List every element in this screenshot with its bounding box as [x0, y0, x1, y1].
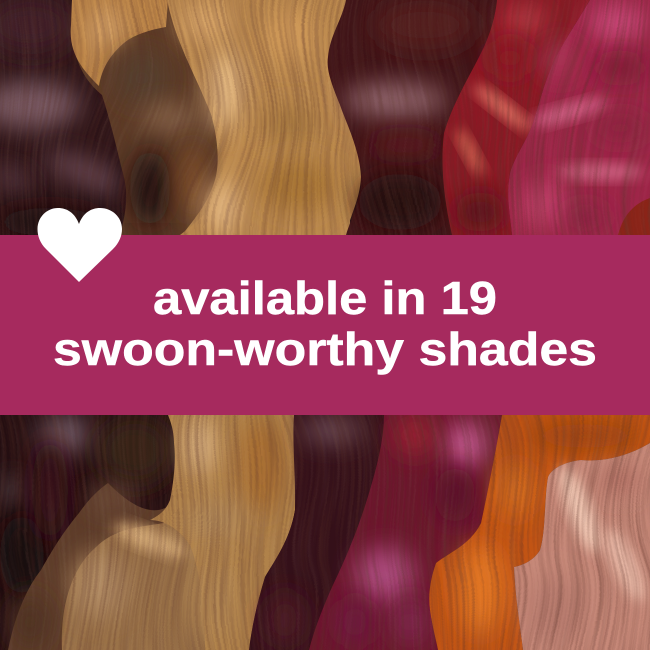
- swatch: deep burgundy: [328, 0, 497, 235]
- hair strand texture: top: [0, 0, 650, 235]
- headline line 1: available in 19: [153, 272, 497, 324]
- swatch: dark burgundy brown: [0, 0, 135, 236]
- swatch: vivid red: [442, 0, 590, 235]
- headline line 2: swoon-worthy shades: [53, 323, 597, 375]
- bottom hair swatches: [0, 415, 650, 650]
- swatch: berry magenta: [309, 415, 502, 650]
- swatch: rose gold: [514, 443, 650, 650]
- top hair swatches: [0, 0, 650, 236]
- swatch: honey blonde: [150, 415, 295, 650]
- hair strand texture: bottom: [0, 415, 650, 650]
- banner: [0, 235, 650, 415]
- swatch: near-black burgundy: [0, 415, 180, 650]
- headline: [53, 272, 597, 375]
- swatch: golden blonde: [167, 0, 361, 236]
- icon: heart: [38, 208, 122, 282]
- swatch: ash blonde and brown: [8, 483, 270, 650]
- swatch: caramel and chestnut brown: [71, 0, 218, 235]
- swatch: dark plum: [249, 415, 384, 650]
- swatch: copper orange: [429, 415, 650, 650]
- swatch: magenta pink: [508, 0, 650, 235]
